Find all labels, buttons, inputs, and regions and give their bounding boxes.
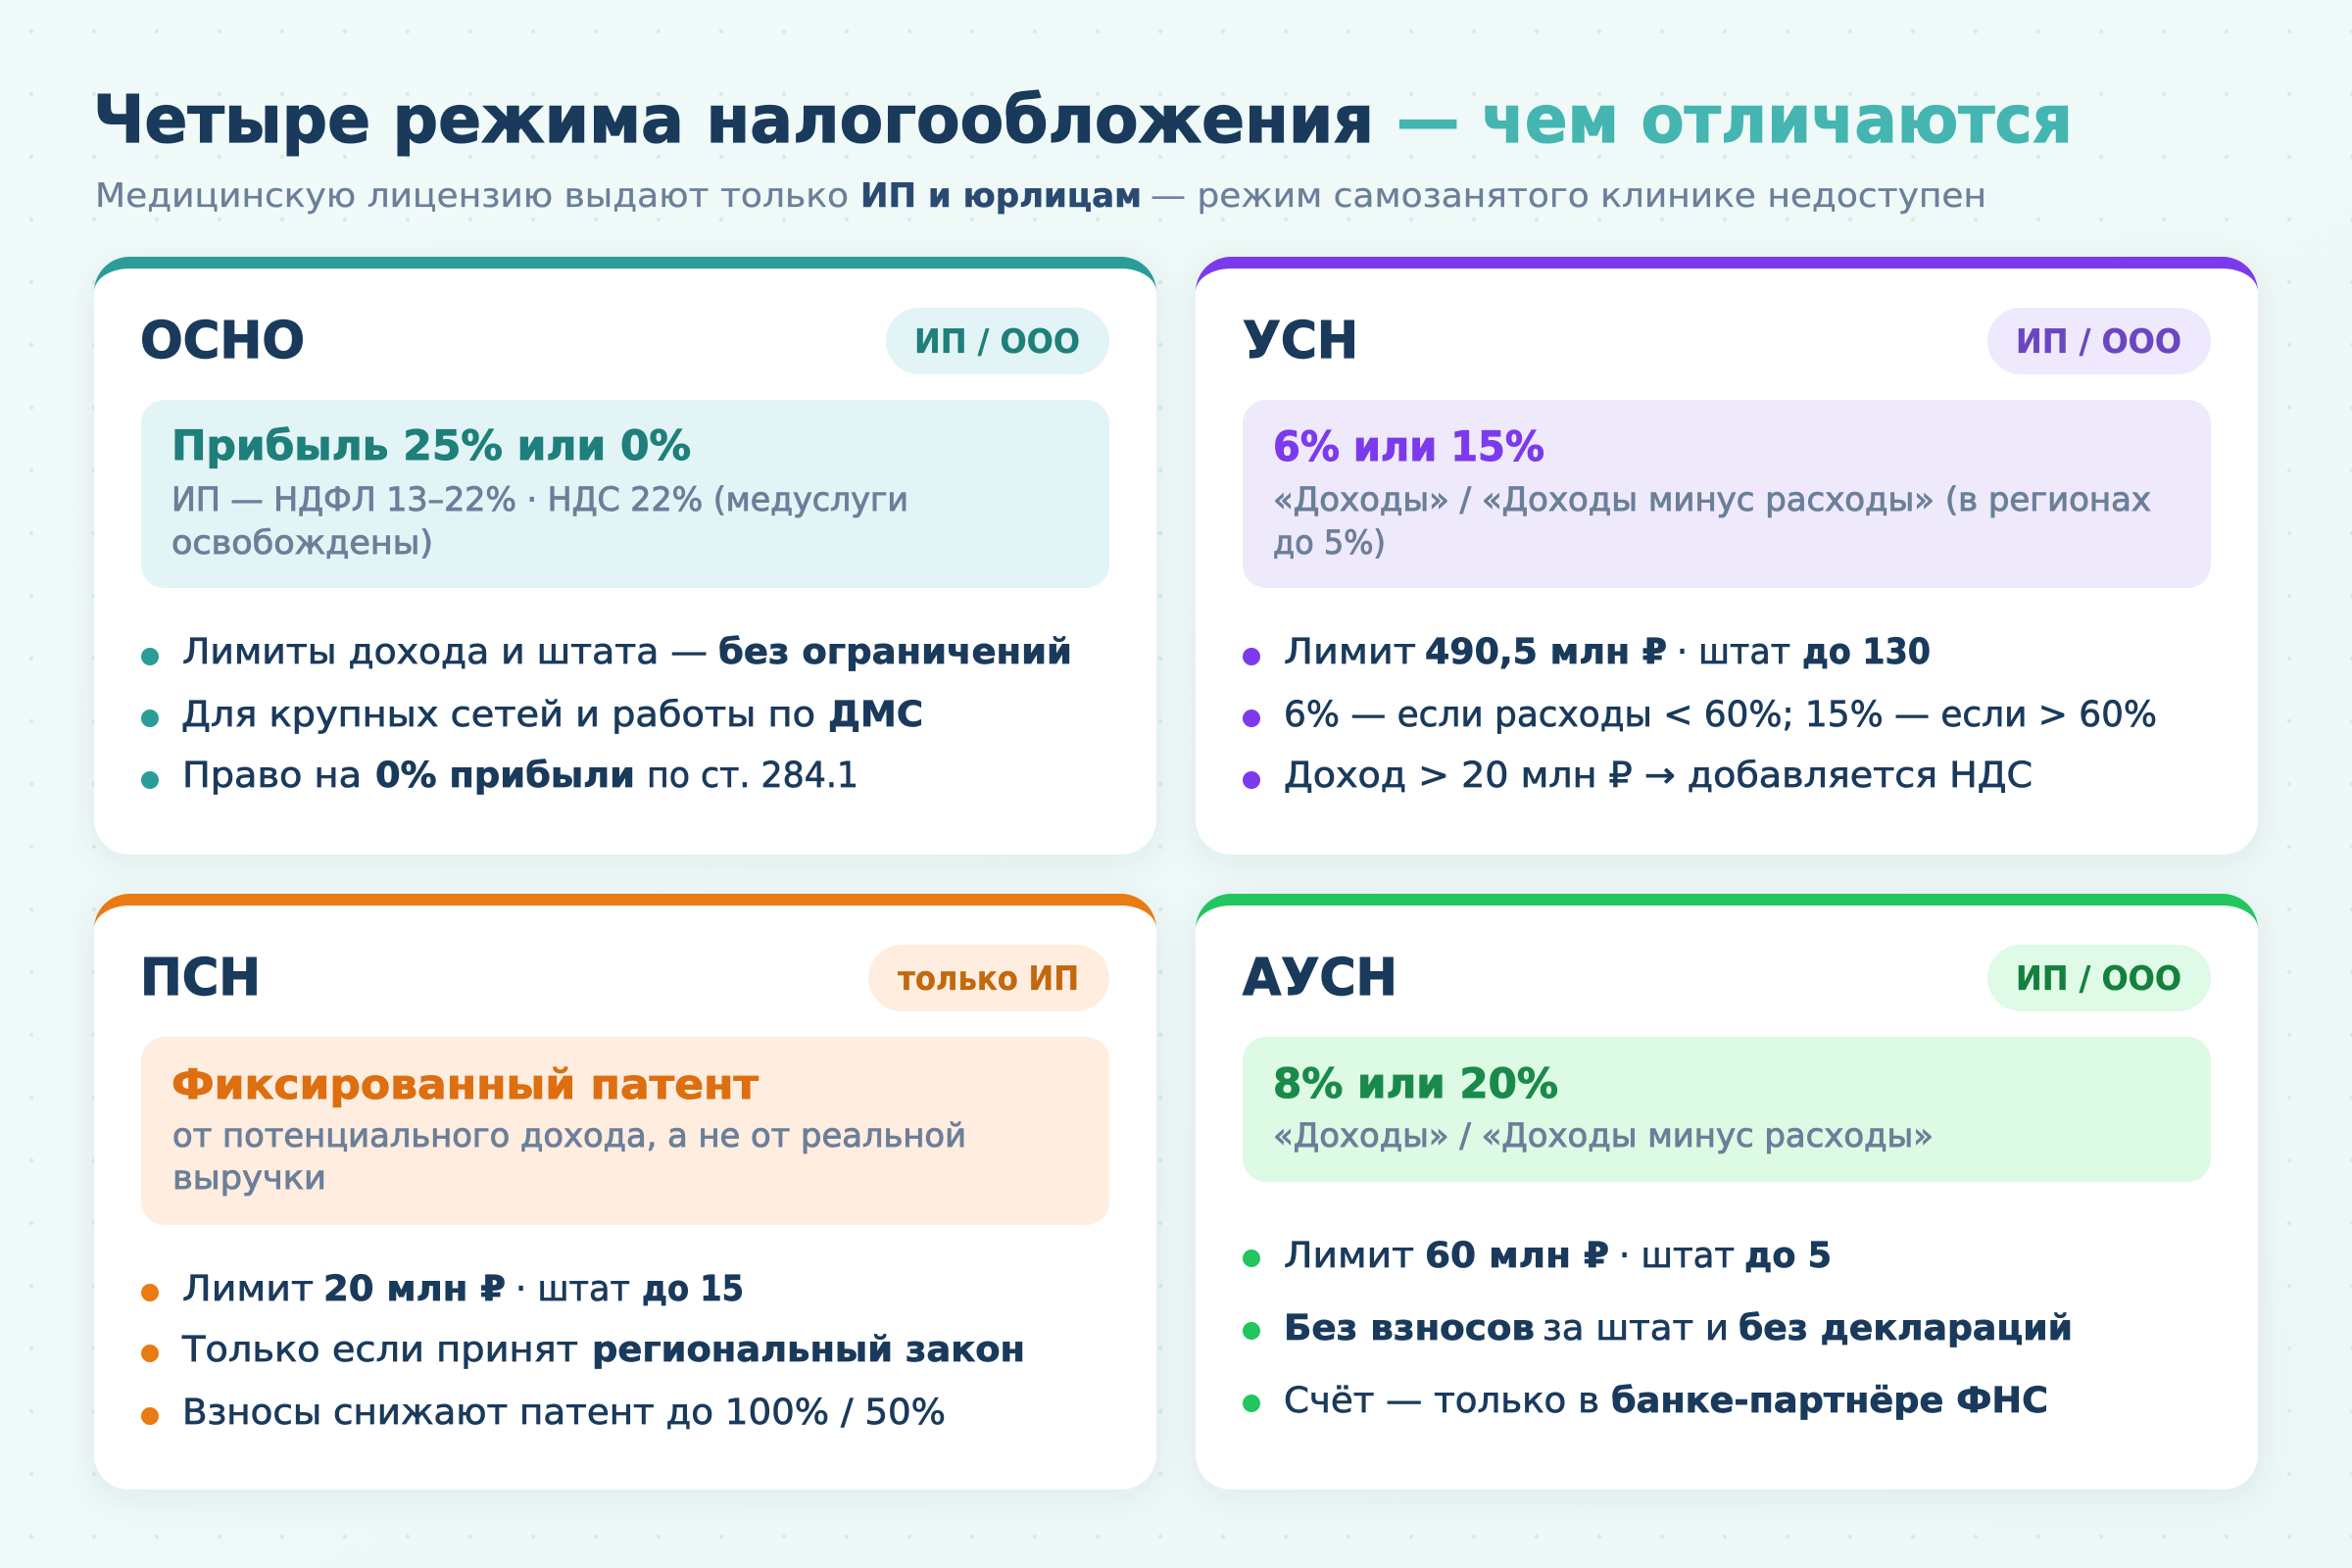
rate box: выручки xyxy=(172,1158,326,1197)
rate box: до 5%) xyxy=(1273,523,1386,562)
title: Четыре режима налогообложения xyxy=(93,81,1374,158)
bullet 2: ДМС xyxy=(828,695,923,735)
bullet 3: Взносы снижают патент до 100% / 50% xyxy=(182,1393,946,1433)
bullet 1: · штат xyxy=(1619,1236,1735,1276)
card background xyxy=(1196,257,2258,855)
rate box: освобождены) xyxy=(172,523,433,562)
heading: УСН: УСН xyxy=(1243,312,1358,370)
rate box: «Доходы» / «Доходы минус расходы» xyxy=(1273,1116,1934,1154)
heading: ПСН: ПСН xyxy=(140,949,261,1007)
bullet 3: Доход > 20 млн ₽ → добавляется НДС xyxy=(1284,756,2033,796)
card background xyxy=(94,894,1156,1490)
rate box: 6% или 15% xyxy=(1273,422,1544,470)
bullet 2 xyxy=(141,1330,1025,1370)
bullet 1 xyxy=(1243,632,1931,672)
rate box: Фиксированный патент xyxy=(172,1060,760,1108)
bullet 1: до 15 xyxy=(642,1269,744,1309)
bullet 1: без ограничений xyxy=(718,632,1072,672)
bullet 2: Только если принят xyxy=(181,1330,578,1370)
badge: ИП / ООО: ИП / ООО xyxy=(914,322,1080,362)
rate box: Прибыль 25% или 0% xyxy=(172,421,691,469)
title: — чем отличаются xyxy=(1396,81,2073,158)
bullet 2: без деклараций xyxy=(1739,1308,2073,1348)
bullet 2 xyxy=(1243,1308,2073,1348)
rate box xyxy=(141,1037,1109,1225)
subtitle: ИП и юрлицам xyxy=(860,176,1142,216)
subtitle: — режим самозанятого клинике недоступен xyxy=(1151,176,1986,216)
card background xyxy=(1196,894,2258,1490)
card background xyxy=(94,257,1156,855)
bullet 1: 490,5 млн ₽ xyxy=(1425,632,1667,672)
bullet 3: банке-партнёре ФНС xyxy=(1611,1381,2048,1421)
bullet 2: Без взносов xyxy=(1284,1308,1535,1348)
bullet 1: · штат xyxy=(515,1269,630,1309)
badge: только ИП: только ИП xyxy=(898,959,1079,999)
bullet 1: 60 млн ₽ xyxy=(1425,1236,1609,1276)
rate box: 8% или 20% xyxy=(1273,1059,1558,1107)
badge: ИП / ООО xyxy=(1987,945,2211,1011)
bullet 2: региональный закон xyxy=(592,1330,1025,1370)
panel: ПСН xyxy=(94,894,1156,1490)
bullet 1: Лимит xyxy=(1284,632,1416,672)
bullet 2: 6% — если расходы < 60%; 15% — если > 60% xyxy=(1284,695,2157,735)
bullet 1: · штат xyxy=(1677,632,1790,672)
rate box xyxy=(1243,1037,2211,1182)
bullet 1: до 5 xyxy=(1744,1236,1832,1276)
badge: ИП / ООО: ИП / ООО xyxy=(2016,322,2181,362)
bullet 2: за штат и xyxy=(1543,1308,1729,1348)
panel: АУСН xyxy=(1196,894,2258,1490)
rate box xyxy=(1243,400,2211,588)
bullet 3: Счёт — только в xyxy=(1284,1381,1599,1421)
heading: ОСНО: ОСНО xyxy=(140,312,305,370)
panel: УСН xyxy=(1196,257,2258,855)
bullet 1: Лимит xyxy=(1284,1236,1414,1276)
panel: ОСНО xyxy=(94,257,1156,855)
title xyxy=(93,81,2073,158)
bullet 3 xyxy=(141,756,858,796)
rate box: ИП — НДФЛ 13–22% · НДС 22% (медуслуги xyxy=(172,480,908,518)
bullet 1: 20 млн ₽ xyxy=(323,1269,506,1309)
bullet 1: до 130 xyxy=(1802,632,1931,672)
bullet 2: Для крупных сетей и работы по xyxy=(181,695,815,735)
bullet 1 xyxy=(141,632,1072,672)
rate box xyxy=(141,400,1109,588)
badge: ИП / ООО xyxy=(1987,308,2211,374)
subtitle: Медицинскую лицензию выдают только xyxy=(95,176,849,216)
badge: ИП / ООО: ИП / ООО xyxy=(2016,959,2181,999)
bullet 3 xyxy=(1243,1381,2048,1421)
bullet 1 xyxy=(141,1269,744,1309)
rate box: от потенциального дохода, а не от реальной xyxy=(172,1116,966,1154)
badge: ИП / ООО xyxy=(886,308,1109,374)
bullet 1 xyxy=(1243,1236,1832,1276)
subtitle xyxy=(95,176,1986,216)
bullet 3: 0% прибыли xyxy=(375,756,635,796)
badge: только ИП xyxy=(868,945,1109,1011)
heading: АУСН: АУСН xyxy=(1243,949,1397,1007)
bullet 3: Право на xyxy=(182,756,362,796)
bullet 3: по ст. 284.1 xyxy=(647,756,858,796)
rate box: «Доходы» / «Доходы минус расходы» (в регионах xyxy=(1273,480,2151,518)
bullet 1: Лимиты дохода и штата — xyxy=(182,632,708,672)
bullet 1: Лимит xyxy=(182,1269,314,1309)
